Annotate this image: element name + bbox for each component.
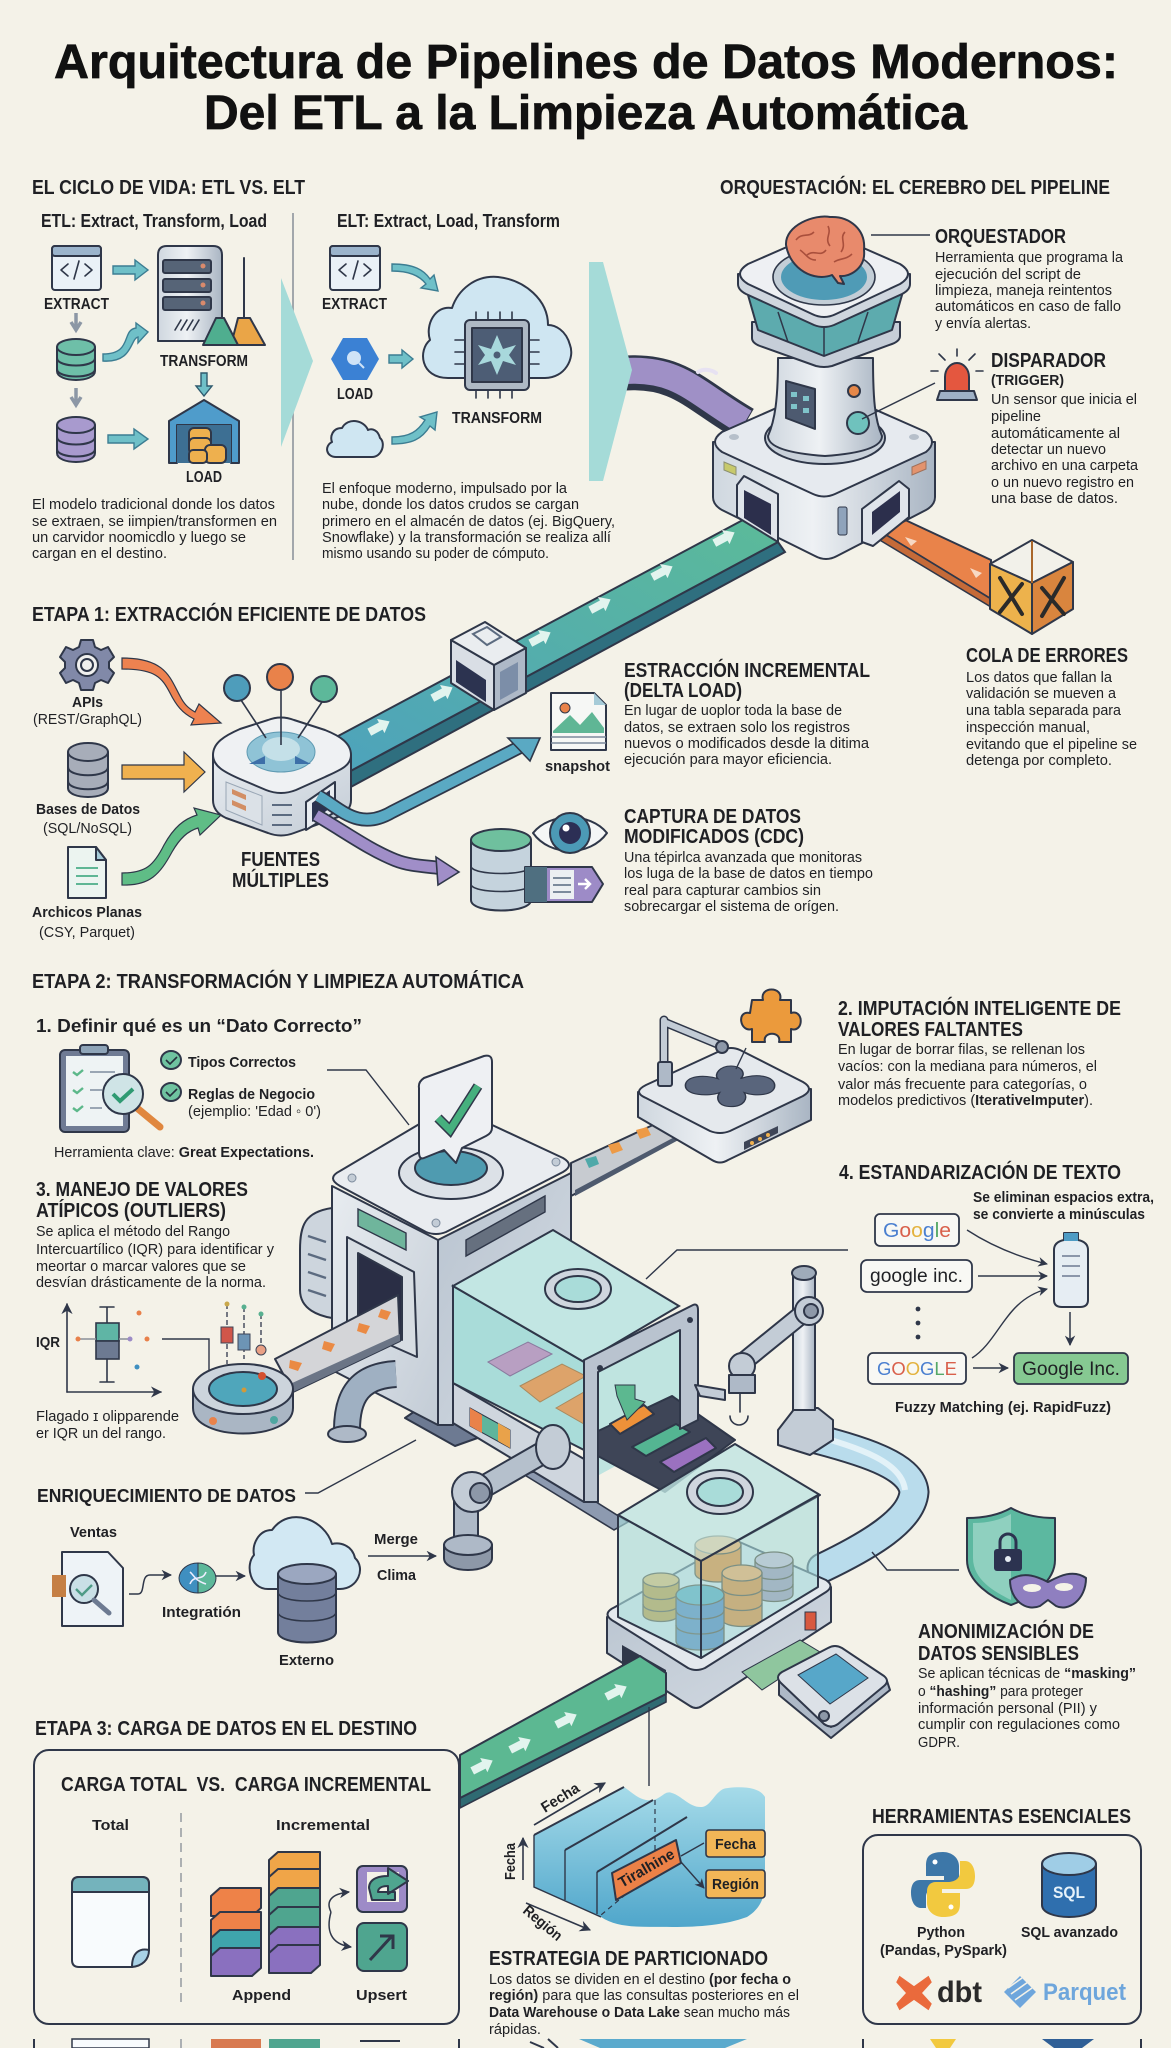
- heading: herramientas: HERRAMIENTAS ESENCIALES: [872, 1806, 1131, 1828]
- arrow: yellow: [122, 752, 205, 792]
- dashed divider: [180, 1813, 182, 2005]
- icon: sql cylinder: SQL: [1053, 1883, 1085, 1902]
- label: ventas: Ventas: [70, 1524, 117, 1541]
- main block: [332, 1108, 571, 1446]
- heading: etapa 1: ETAPA 1: EXTRACCIÓN EFICIENTE DE DATOS: [32, 602, 426, 626]
- text: flagado: Flagado ɪ olipparende: [36, 1408, 179, 1425]
- ELT description: primero en el almacén de datos (ej. BigQuery,: [322, 513, 615, 530]
- callout: cola de errores: COLA DE ERRORES: [966, 645, 1128, 667]
- callout: imputacion: valor más frecuente para categorías, o: [838, 1076, 1087, 1093]
- panel: herramientas: [863, 1835, 1141, 2024]
- connector: glass to estandarizacion: [646, 1250, 848, 1279]
- callout: disparador: [991, 350, 1139, 507]
- label line orquestador: [871, 234, 930, 236]
- icon: file: [68, 847, 106, 898]
- icon: alarm trigger: [862, 349, 983, 419]
- callout: disparador: DISPARADOR: [991, 350, 1106, 372]
- chart: append stack: [211, 1888, 261, 1976]
- ELT description: [322, 480, 615, 562]
- arrows: branch: [329, 1892, 351, 1947]
- icon: shield with mask: [967, 1508, 1086, 1608]
- callout: cdc: sobrecargar el sistema de orígen.: [624, 898, 839, 915]
- arrow: green: [122, 808, 221, 885]
- callout: cdc: real para capturar cambios sin: [624, 882, 821, 899]
- label: fecha vertical: Fecha: [502, 1842, 519, 1880]
- box: GOOGLE: GOOGLE: [877, 1359, 957, 1379]
- label: bases de datos: Bases de Datos: [36, 801, 140, 818]
- icon: purple database: [57, 417, 95, 462]
- ETL description: cargan en el destino.: [32, 545, 167, 562]
- text: flagado: er IQR un del rango.: [36, 1425, 166, 1442]
- box: google inc: [861, 1260, 972, 1292]
- callout: imputacion: [838, 996, 1121, 1109]
- label: fuentes multiples: [232, 849, 329, 892]
- label: clima: Clima: [377, 1567, 417, 1584]
- label: incremental: Incremental: [276, 1817, 370, 1834]
- icon: bottle: [1054, 1233, 1088, 1307]
- arrow: gray down 2: [71, 388, 81, 405]
- lower belt: [460, 1656, 666, 1808]
- text: herramienta clave: Herramienta clave: Great Expectations.: [54, 1144, 314, 1161]
- panel: carga total vs incremental: [34, 1750, 459, 2024]
- scanner with keyboard: [742, 1640, 890, 1738]
- callout: outliers: 3. MANEJO DE VALORES: [36, 1179, 248, 1201]
- front pipe arm: [444, 1425, 570, 1570]
- left elbow pipe: [328, 1374, 396, 1442]
- front strip of status lights: [470, 1408, 510, 1448]
- callout: anonimizacion: o “hashing” para proteger: [918, 1683, 1083, 1700]
- label: python: (Pandas, PySpark): [880, 1942, 1007, 1959]
- callout: particionado: Data Warehouse o Data Lake sean mucho más: [489, 2004, 790, 2021]
- callout: orquestador: limpieza, maneja reintentos: [935, 282, 1112, 299]
- icon: warehouse: [169, 400, 239, 463]
- neck: [765, 358, 885, 464]
- connector: check flag callout: [327, 1070, 409, 1125]
- label: externo: Externo: [279, 1652, 334, 1669]
- label: fuentes multiples: FUENTES: [241, 849, 320, 871]
- callout: anonimizacion: ANONIMIZACIÓN DE: [918, 1619, 1094, 1643]
- callout: particionado: Los datos se dividen en el destino (por fecha o: [489, 1971, 791, 1988]
- icon: upsert box: [357, 1923, 407, 1971]
- callout: delta load: (DELTA LOAD): [624, 680, 742, 702]
- ETL description: se extraen, se iimpien/transformen en: [32, 513, 277, 530]
- glass cube with cylinders: [618, 1444, 820, 1658]
- icon: green database: [57, 339, 95, 380]
- callout: disparador: Un sensor que inicia el: [991, 391, 1137, 408]
- arrow: doc to integration: [129, 1575, 171, 1594]
- arrow: chevron to orchestrator: [589, 262, 632, 481]
- slice lines: [534, 1787, 687, 1872]
- icon: append box: [357, 1866, 408, 1912]
- icon: python: [911, 1852, 975, 1917]
- icon: cdc database and tag: [471, 829, 603, 910]
- icon: code window: [52, 246, 101, 290]
- callout: orquestador: automáticos en caso de fallo: [935, 298, 1121, 315]
- glass chamber: [453, 1230, 698, 1502]
- label: merge: Merge: [374, 1531, 418, 1548]
- heading: enriquecimiento: ENRIQUECIMIENTO DE DATOS: [37, 1486, 296, 1506]
- callout: orquestador: Herramienta que programa la: [935, 249, 1124, 266]
- box: fecha: [706, 1830, 765, 1857]
- box: google inc: google inc.: [870, 1266, 963, 1287]
- callout: outliers: desvían drásticamente de la norma.: [36, 1274, 266, 1291]
- door: [347, 1237, 417, 1357]
- imputer box: [638, 1020, 811, 1162]
- left door: [737, 476, 778, 542]
- connector: belt to partition: [648, 1707, 650, 1786]
- callout: particionado: región) para que las consultas posteriores en el: [489, 1987, 799, 2004]
- callout: orquestador: ejecución del script de: [935, 266, 1081, 283]
- callout: anonimizacion: DATOS SENSIBLES: [918, 1643, 1079, 1665]
- arrow: merge: [368, 1555, 436, 1557]
- arrow: GOOGLE to result: [973, 1367, 1008, 1369]
- callout: cola de errores: validación se mueven a: [966, 685, 1117, 702]
- title: Arquitectura de Pipelines de Datos Modernos:: [54, 36, 1118, 89]
- note: se convierte a minúsculas: [973, 1206, 1145, 1223]
- callout: delta load: nuevos o modificados desde la ditima: [624, 735, 870, 752]
- arrow: db to warehouse: [108, 429, 148, 449]
- machine: central pipeline: [193, 990, 914, 1808]
- callout: anonimizacion: Se aplican técnicas de “masking”: [918, 1665, 1136, 1682]
- icon: cloud with database: [250, 1517, 360, 1642]
- callout: orquestador: [935, 226, 1124, 332]
- check: tipos: [161, 1051, 181, 1069]
- note: Se eliminan espacios extra,: [973, 1189, 1154, 1206]
- callout: cdc: CAPTURA DE DATOS: [624, 806, 801, 828]
- rail under chamber: [523, 1470, 628, 1530]
- label: python: Python: [917, 1924, 965, 1941]
- icon: cloud with chip: [423, 277, 571, 398]
- bottom repeated strip: [34, 2039, 1141, 2048]
- panel title: CARGA TOTAL VS. CARGA INCREMENTAL: [61, 1774, 431, 1796]
- logo: dbt: dbt: [937, 1976, 982, 2009]
- icon: snapshot: [551, 693, 606, 750]
- label: tipos correctos: Tipos Correctos: [188, 1054, 296, 1071]
- box: Google Inc result: Google Inc.: [1022, 1359, 1120, 1380]
- callout: particionado: [489, 1948, 799, 2038]
- label: total: Total: [92, 1817, 129, 1834]
- logo: dbt: [898, 1976, 982, 2009]
- ETL description: un carvidor noomicdlo y luego se: [32, 529, 246, 546]
- label: apis: APIs: [72, 694, 103, 711]
- belt: orange error belt: [873, 505, 991, 607]
- label: load: LOAD: [337, 386, 373, 403]
- callout: delta load: datos, se extraen solo los registros: [624, 719, 850, 736]
- callout: cola de errores: [966, 645, 1137, 769]
- icon: small cube on belt: [451, 622, 526, 710]
- label: snapshot: snapshot: [545, 758, 610, 775]
- conveyor floor with slabs: [590, 1320, 735, 1492]
- label: reglas de negocio: [188, 1086, 321, 1120]
- callout: cola de errores: Los datos que fallan la: [966, 669, 1113, 686]
- ELT description: mismo usando su poder de cómputo.: [322, 545, 549, 562]
- callout: outliers: meortar o marcar valores que se: [36, 1258, 246, 1275]
- callout: anonimizacion: GDPR.: [918, 1734, 960, 1751]
- box: region: Región: [712, 1876, 759, 1893]
- label: transform: TRANSFORM: [452, 410, 542, 427]
- title: [54, 36, 1118, 140]
- outlier markers: [221, 1302, 266, 1364]
- icon: clipboard with magnifier: [60, 1045, 160, 1132]
- logo: parquet: [1004, 1976, 1126, 2008]
- label: reglas de negocio: Reglas de Negocio: [188, 1086, 315, 1103]
- callout: cola de errores: inspección manual,: [966, 719, 1090, 736]
- icon: server with brooms: [158, 246, 265, 345]
- label: transform: TRANSFORM: [160, 353, 248, 370]
- callout: delta load: ejecución para mayor eficiencia.: [624, 751, 832, 768]
- icon: sql cylinder: [1042, 1853, 1096, 1917]
- label: bases de datos: (SQL/NoSQL): [43, 820, 132, 837]
- label: fuentes multiples: MÚLTIPLES: [232, 868, 329, 892]
- label: region: Región: [519, 1902, 566, 1945]
- validation ring: [399, 1147, 503, 1199]
- icon: small cloud: [327, 421, 383, 457]
- logo: parquet: Parquet: [1043, 1979, 1126, 2006]
- box: Google Inc result: [1014, 1353, 1128, 1384]
- panel: fuentes: [32, 622, 873, 941]
- callout: imputacion: vacíos: con la mediana para números, el: [838, 1058, 1097, 1075]
- right door: [862, 481, 909, 546]
- connector: enrichment: [305, 1440, 416, 1493]
- callout: cdc: los luga de la base de datos en tiempo: [624, 865, 873, 882]
- label: fecha top: Fecha: [538, 1779, 583, 1816]
- arrow: curved to server: [103, 323, 148, 361]
- panel: enrichment flow: [52, 1517, 436, 1669]
- ELT description: Snowflake) y la transformación se realiza allí: [322, 529, 612, 546]
- ELT description: nube, donde los datos crudos se cargan: [322, 496, 579, 513]
- label: IQR: IQR: [36, 1334, 60, 1351]
- outlier ring: [193, 1364, 293, 1434]
- icon: eye: [533, 813, 607, 853]
- callout: cdc: Una tépirlca avanzada que monitoras: [624, 849, 862, 866]
- callout: outliers: Intercuartílico (IQR) para identificar y: [36, 1241, 274, 1258]
- arrow: cloud up to transform: [392, 412, 437, 444]
- box: region: [706, 1870, 765, 1898]
- label: reglas de negocio: (ejemplio: 'Edad ◦ 0'): [188, 1103, 321, 1120]
- arrow: orange: [122, 658, 221, 725]
- ETL description: [32, 496, 277, 562]
- callout: cola de errores: una tabla separada para: [966, 702, 1122, 719]
- callout: outliers: [36, 1179, 274, 1291]
- label: apis: [33, 694, 142, 728]
- callout: delta load: [624, 658, 870, 768]
- arrow: integration to cloud: [216, 1575, 245, 1577]
- water block: [534, 1787, 765, 1927]
- box: fecha: Fecha: [715, 1836, 757, 1853]
- portal frame: [584, 1305, 698, 1502]
- callout: orquestador: y envía alertas.: [935, 315, 1031, 332]
- arrow: load to chip: [389, 350, 413, 368]
- check: reglas: [161, 1083, 181, 1101]
- icon: hub box: [213, 664, 351, 836]
- arrows: to bottle: [967, 1230, 1047, 1358]
- label: load: LOAD: [186, 469, 222, 486]
- dots: [916, 1307, 920, 1339]
- callout: disparador: pipeline: [991, 408, 1041, 425]
- label: upsert: Upsert: [356, 1987, 407, 2004]
- label: archivos: [32, 904, 142, 941]
- label: integration: Integratión: [162, 1604, 241, 1621]
- callout: disparador: detectar un nuevo: [991, 441, 1106, 458]
- arrow: chevron between ETL and ELT: [281, 278, 313, 447]
- panel: particionado diagram: [502, 1779, 765, 1945]
- label: extract: EXTRACT: [322, 296, 387, 313]
- callout: anonimizacion: [918, 1619, 1136, 1751]
- title: Del ETL a la Limpieza Automática: [204, 87, 967, 140]
- head: [738, 233, 910, 367]
- callout: orquestador: ORQUESTADOR: [935, 226, 1066, 248]
- orange label: [612, 1840, 681, 1900]
- text: flagado: [36, 1408, 179, 1442]
- callout: cola de errores: detenga por completo.: [966, 752, 1112, 769]
- heading: orquestacion: ORQUESTACIÓN: EL CEREBRO DEL PIPELINE: [720, 175, 1110, 199]
- box: GOOGLE: [868, 1353, 966, 1384]
- outlier belt: [275, 1295, 400, 1392]
- water pipe: [805, 1434, 914, 1568]
- callout: imputacion: En lugar de borrar filas, se rellenan los: [838, 1041, 1085, 1058]
- arrow: blue to snapshot: [318, 738, 540, 820]
- imputer belt: [571, 1112, 685, 1196]
- icon: orchestrator tower: [713, 217, 935, 559]
- label: apis: (REST/GraphQL): [33, 711, 142, 728]
- arrow: bottle down: [1069, 1312, 1071, 1345]
- callout: disparador: una base de datos.: [991, 490, 1118, 507]
- heading: etapa 2: ETAPA 2: TRANSFORMACIÓN Y LIMPIEZA AUTOMÁTICA: [32, 969, 524, 993]
- arrow: transform to load: [196, 373, 212, 396]
- heading 4: 4. ESTANDARIZACIÓN DE TEXTO: [839, 1160, 1121, 1184]
- callout: delta load: ESTRACCIÓN INCREMENTAL: [624, 658, 870, 682]
- subheading 1: 1. Definir qué es un “Dato Correcto”: [36, 1016, 362, 1036]
- icon: integration: [179, 1563, 216, 1593]
- callout: disparador: o un nuevo registro en: [991, 474, 1134, 491]
- callout: cdc: MODIFICADOS (CDC): [624, 826, 804, 848]
- callout: outliers: ATÍPICOS (OUTLIERS): [36, 1199, 226, 1222]
- panel: dato correcto: [36, 1016, 362, 1161]
- panel: ELT: [322, 211, 615, 562]
- arrow: extract to server: [113, 260, 148, 280]
- panel: estandarizacion: [839, 1160, 1154, 1416]
- divider ETL/ELT: [292, 213, 294, 560]
- puzzle piece: [741, 990, 801, 1042]
- ELT description: El enfoque moderno, impulsado por la: [322, 480, 568, 497]
- icon: gear: [60, 640, 114, 690]
- icon: BigQuery hexagon: [331, 338, 379, 380]
- callout: cola de errores: evitando que el pipeline se: [966, 736, 1137, 753]
- arrow: gray down: [71, 313, 81, 330]
- belt: main teal data belt: [325, 505, 785, 795]
- belt arrows: [366, 525, 738, 739]
- chart: incremental stack: [269, 1852, 320, 1973]
- icon: brain: [786, 217, 864, 284]
- rear pod: [300, 1208, 332, 1318]
- callout: particionado: rápidas.: [489, 2021, 541, 2038]
- right robot arm: [695, 1266, 833, 1455]
- label: sql avanzado: SQL avanzado: [1021, 1924, 1118, 1941]
- pipe: purple input belt: [625, 370, 745, 424]
- label: extract: EXTRACT: [44, 296, 109, 313]
- tower base: [713, 389, 935, 559]
- callout: imputacion: 2. IMPUTACIÓN INTELIGENTE DE: [838, 996, 1121, 1020]
- ETL description: El modelo tradicional donde los datos: [32, 496, 275, 513]
- arrow: extract to cloud: [392, 264, 438, 291]
- ETL subheading: ETL: Extract, Transform, Load: [41, 211, 267, 231]
- icon: sheet: [72, 1877, 149, 1967]
- callout: disparador: archivo en una carpeta: [991, 457, 1139, 474]
- callout: anonimizacion: cumplir con regulaciones como: [918, 1716, 1120, 1733]
- callout: disparador: (TRIGGER): [991, 372, 1064, 389]
- label: append: Append: [232, 1987, 291, 2004]
- icon: error crate: [990, 540, 1073, 634]
- icon: gray database: [68, 743, 108, 797]
- label: bases de datos: [36, 801, 140, 837]
- icon: sales doc: [52, 1552, 123, 1626]
- check flag: [419, 1056, 492, 1163]
- heading: etapa 3: ETAPA 3: CARGA DE DATOS EN EL DESTINO: [35, 1718, 417, 1740]
- label: archivos: (CSY, Parquet): [39, 924, 135, 941]
- callout: outliers: Se aplica el método del Rango: [36, 1223, 230, 1240]
- label: archivos: Archicos Planas: [32, 904, 142, 921]
- chart: IQR boxplot: [67, 1304, 161, 1392]
- label: python: [880, 1924, 1007, 1959]
- note: [973, 1189, 1154, 1223]
- callout: anonimizacion: información personal (PII) y: [918, 1700, 1097, 1717]
- icon: code window: [330, 246, 380, 290]
- arrows: [534, 1783, 605, 1825]
- label: fuzzy: Fuzzy Matching (ej. RapidFuzz): [895, 1399, 1111, 1416]
- ELT subheading: ELT: Extract, Load, Transform: [337, 211, 560, 231]
- box: Google: Google: [883, 1220, 951, 1242]
- heading: ciclo de vida: EL CICLO DE VIDA: ETL VS. ELT: [32, 177, 305, 199]
- callout: cdc: [624, 806, 873, 915]
- callout: disparador: automáticamente al: [991, 425, 1120, 442]
- loading base: [607, 1540, 831, 1708]
- connector IQR to ring: [162, 1339, 209, 1378]
- callout: delta load: En lugar de uoplor toda la base de: [624, 702, 842, 719]
- orange label: Tiralhine: [616, 1846, 678, 1891]
- callout: imputacion: modelos predictivos (IterativeImputer).: [838, 1092, 1093, 1109]
- arrow: purple to cdc: [316, 815, 459, 885]
- connector: pipe to shield: [872, 1552, 959, 1570]
- callout: imputacion: VALORES FALTANTES: [838, 1019, 1023, 1041]
- callout: particionado: ESTRATEGIA DE PARTICIONADO: [489, 1948, 768, 1970]
- panel: ETL: [32, 211, 277, 562]
- box: Google: [875, 1214, 959, 1246]
